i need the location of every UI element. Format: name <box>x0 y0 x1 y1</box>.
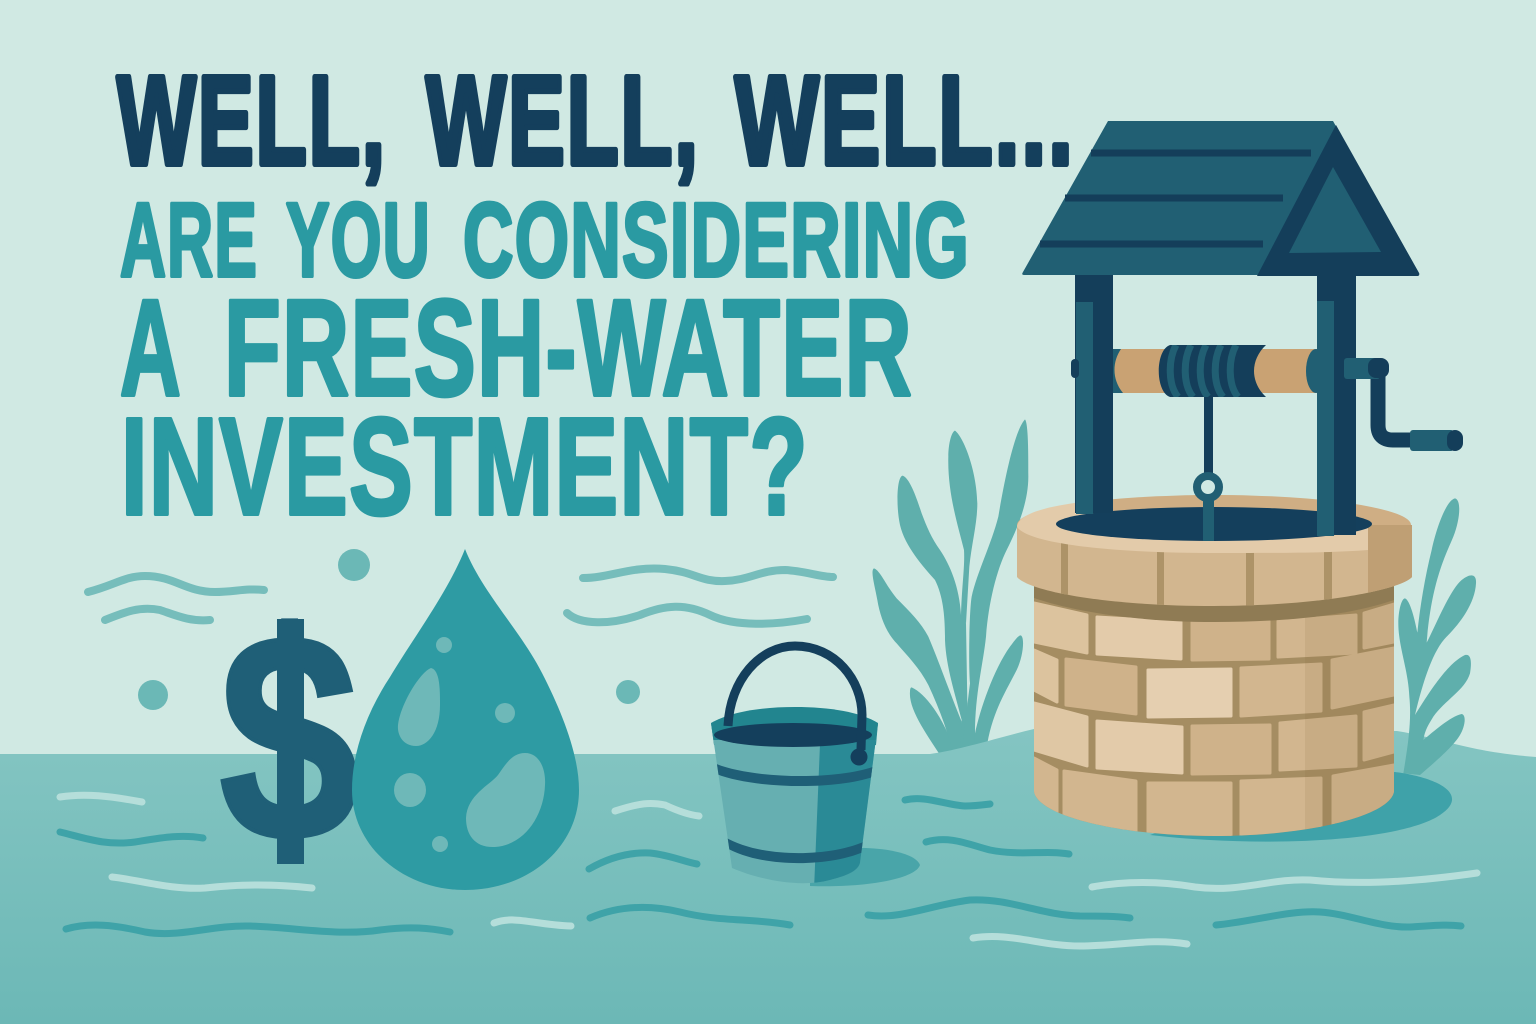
bucket knob <box>850 748 868 766</box>
title <box>117 50 1075 544</box>
bucket back rim <box>711 707 878 745</box>
roof <box>1022 121 1419 275</box>
heading: are you considering <box>120 182 970 299</box>
well shadow <box>1150 772 1452 842</box>
hook ring <box>1197 476 1219 541</box>
heading: well, well, well <box>117 50 1075 191</box>
heading: are you considering: YOU <box>286 182 431 299</box>
brick shade <box>1305 602 1394 829</box>
waves in the water <box>60 795 1477 946</box>
well opening <box>1056 507 1372 541</box>
gable inset <box>1289 167 1381 253</box>
rim band <box>1017 525 1412 606</box>
rope <box>1204 397 1213 477</box>
floating bubbles <box>138 549 640 710</box>
rope spool <box>1155 344 1270 398</box>
bucket water <box>714 723 872 747</box>
brick body <box>1030 580 1400 840</box>
plant: left <box>872 419 1028 763</box>
ground water <box>0 729 1536 1024</box>
rim back <box>1017 495 1411 555</box>
rim top surface <box>1017 501 1368 553</box>
plant: right <box>1398 498 1476 775</box>
under-rim band <box>1034 585 1394 622</box>
icon: water drop <box>352 549 579 890</box>
heading: a fresh-water: FRESH-WATER <box>224 272 913 425</box>
bucket handle <box>728 646 862 750</box>
darker ripples <box>60 799 1461 934</box>
heading: well, well, well: WELL... <box>735 50 1075 191</box>
roof gable <box>1257 125 1419 276</box>
bucket body <box>711 724 878 884</box>
roof planks <box>1040 153 1311 244</box>
heading: investment: INVESTMENT? <box>121 390 809 544</box>
bucket shadow <box>810 848 920 886</box>
heading: well, well, well: WELL, <box>117 50 387 191</box>
right post <box>1317 275 1356 536</box>
crank <box>1344 358 1463 451</box>
icon: bucket <box>700 646 920 890</box>
heading: a fresh-water: A <box>120 272 182 425</box>
light ripples <box>60 795 1477 946</box>
left post <box>1075 275 1113 514</box>
heading: are you considering: ARE <box>120 182 258 299</box>
heading: well, well, well: WELL, <box>426 50 700 191</box>
brick courses <box>1034 603 1394 840</box>
heading: are you considering: CONSIDERING <box>463 182 970 299</box>
waves above the horizon <box>88 569 833 624</box>
icon: dollar sign: $ <box>219 572 359 903</box>
heading: a fresh-water <box>120 272 913 425</box>
left axle knob <box>1071 359 1079 378</box>
well <box>1015 121 1463 840</box>
axle <box>1113 349 1334 393</box>
